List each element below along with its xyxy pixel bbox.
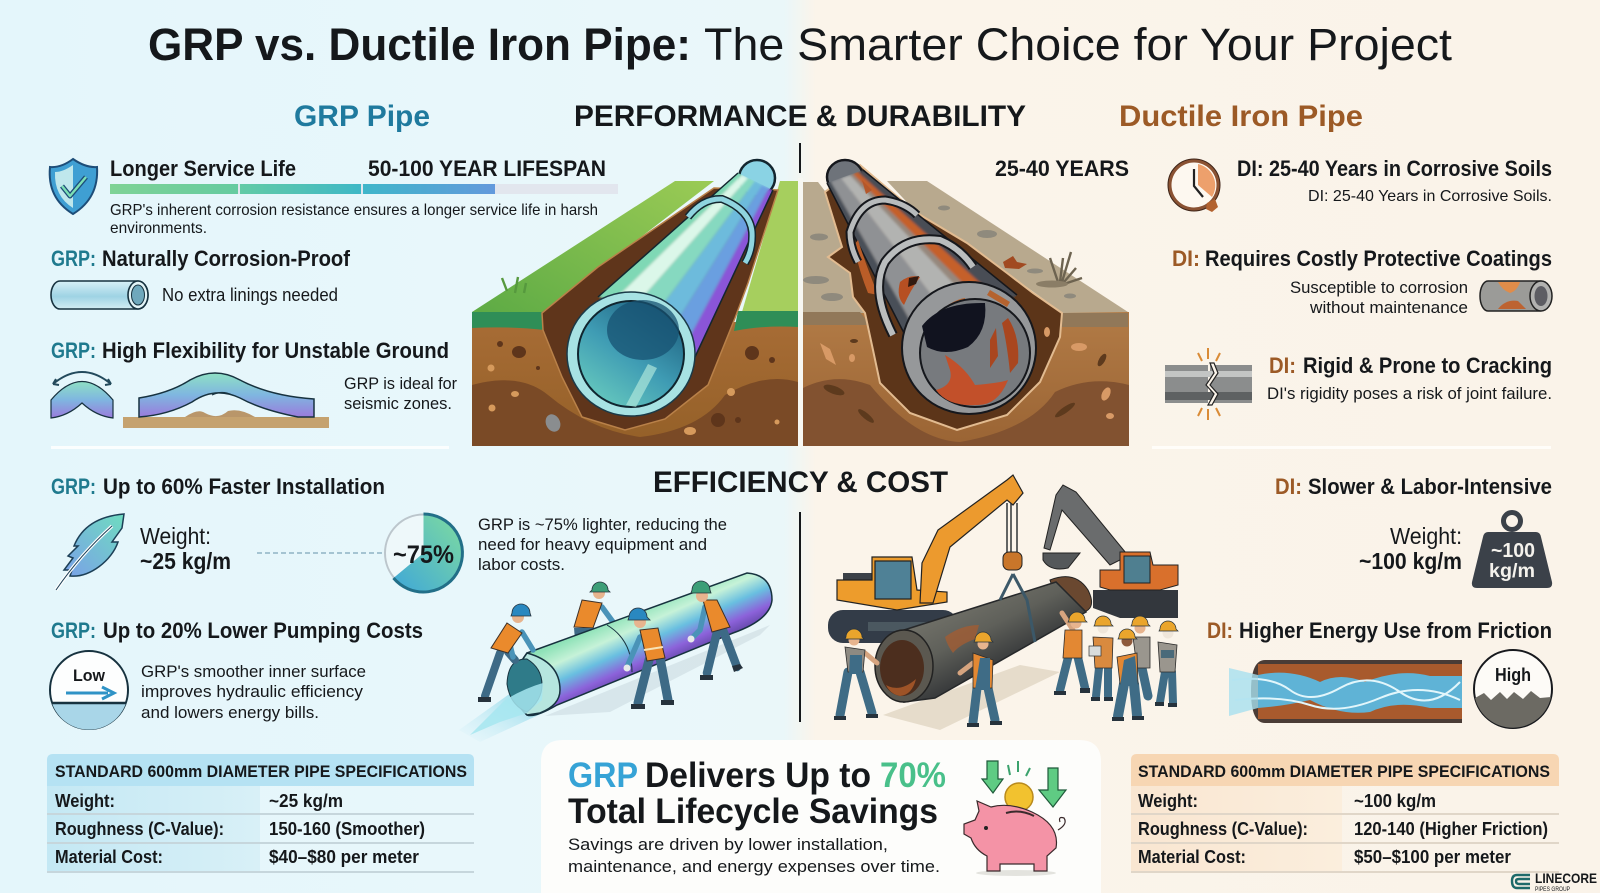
excavator: grey rear [1043, 485, 1178, 618]
icon: low friction gauge: Low [73, 666, 106, 685]
panel: DI efficiency [828, 474, 1552, 730]
text: seismic zones: GRP is ideal for [344, 374, 457, 393]
logo: Linecore [1512, 870, 1597, 893]
icon: low friction gauge [50, 651, 128, 730]
row: roughness: Roughness (C-Value): [55, 819, 224, 839]
row: weight: ~25 kg/m [269, 791, 343, 811]
heading: coatings: Requires Costly Protective Coatings [1205, 246, 1552, 271]
heading: Ductile Iron Pipe: Ductile Iron Pipe [1119, 100, 1363, 133]
title: The Smarter Choice for Your Project [704, 19, 1453, 70]
heading: corrosion proof: GRP: [51, 246, 96, 271]
heading: pumping costs: GRP: [51, 618, 96, 643]
worker front [624, 608, 674, 709]
text: service life description [110, 202, 598, 237]
heading: friction: DI: [1207, 618, 1233, 643]
heading: performance and durability: PERFORMANCE & DURABILITY [574, 100, 1026, 133]
row: material cost: Material Cost: [55, 847, 163, 867]
text: GRP weight [140, 523, 231, 574]
text: lighter description: GRP is ~75% lighter, reducing the [478, 515, 727, 534]
text: service life description: environments. [110, 220, 207, 237]
heading: faster installation: GRP: [51, 474, 96, 499]
row: weight [55, 791, 343, 811]
table rows [1131, 814, 1559, 872]
text: hydraulic efficiency: improves hydraulic efficiency [141, 682, 364, 701]
text: service life description: GRP's inherent corrosion resistance ensures a longer service life in harsh [110, 202, 598, 219]
icon: piggy bank [964, 761, 1066, 876]
icon: clock [1168, 159, 1220, 212]
panel: DI specification table [1131, 754, 1559, 872]
text: DI weight: ~100 kg/m [1359, 548, 1462, 574]
heading: rigid: Rigid & Prone to Cracking [1303, 353, 1552, 378]
center gap [798, 178, 803, 448]
worker [960, 632, 1002, 727]
heading: coatings: DI: [1172, 246, 1200, 271]
heading: corrosive soils: DI: 25-40 Years in Corrosive Soils [1237, 156, 1552, 181]
lifespan bar [110, 184, 618, 194]
text: joint failure: DI's rigidity poses a risk of joint failure. [1267, 385, 1552, 403]
icon: heavy weight [1472, 512, 1552, 588]
section dividers [51, 446, 449, 449]
worker [1131, 616, 1150, 696]
illustration: rusted ductile iron pipe in trench [803, 160, 1129, 446]
lifespan label: 25-40 YEARS [995, 156, 1129, 181]
dashed connector [257, 552, 383, 554]
icon: pipe over unstable ground [123, 373, 329, 428]
headline: GRP [568, 756, 638, 795]
table header [47, 754, 474, 786]
text: hydraulic efficiency: and lowers energy bills. [141, 703, 319, 722]
text: susceptible to corrosion: Susceptible to corrosion [1290, 278, 1468, 297]
text: susceptible to corrosion [1290, 278, 1468, 317]
text: no extra linings: No extra linings needed [162, 285, 338, 305]
title: GRP vs. Ductile Iron Pipe: [148, 19, 691, 70]
icon: heavy weight: ~100 [1491, 540, 1535, 562]
row: roughness [1138, 819, 1548, 839]
text: hydraulic efficiency: GRP's smoother inner surface [141, 662, 366, 681]
icon: cracked pipe [1165, 348, 1252, 420]
row: material cost: $50–$100 per meter [1354, 847, 1511, 867]
illustration: workers lifting GRP pipe [459, 573, 772, 742]
icon: heavy weight: kg/m [1489, 561, 1535, 582]
collar [688, 199, 752, 263]
row: roughness [55, 819, 425, 839]
row: weight: Weight: [55, 791, 115, 811]
row: roughness: 150-160 (Smoother) [269, 819, 425, 839]
worker left [478, 604, 533, 702]
heading: flexibility: High Flexibility for Unstable Ground [102, 338, 449, 363]
row: weight [1138, 791, 1436, 811]
row: roughness: 120-140 (Higher Friction) [1354, 819, 1548, 839]
text: savings description: Savings are driven by lower installation, [568, 835, 888, 854]
headline: Delivers Up to [645, 756, 871, 795]
table header [1131, 754, 1559, 786]
icon: shield [50, 159, 97, 214]
text: hydraulic efficiency [141, 662, 366, 722]
tube colour bands [598, 173, 772, 354]
panel: DI performance [995, 156, 1552, 420]
text: lighter description: labor costs. [478, 555, 565, 574]
icon: rough pipe with turbulent flow [1229, 660, 1462, 723]
card [541, 740, 1101, 893]
left column shading [47, 786, 260, 872]
illustration: excavators lifting iron pipe [828, 475, 1178, 730]
tube colour bands [828, 170, 1017, 330]
icon: high friction gauge [1474, 650, 1552, 728]
heading: GRP Pipe: GRP Pipe [294, 100, 430, 133]
worker [1155, 621, 1178, 707]
rings [850, 200, 917, 262]
text: corrosive soils: DI: 25-40 Years in Corrosive Soils. [1308, 188, 1552, 205]
heading: efficiency and cost: EFFICIENCY & COST [653, 466, 948, 499]
illustration: GRP pipe in trench [472, 160, 798, 446]
text: savings description [568, 835, 940, 876]
excavator: orange front [828, 475, 1023, 643]
icon: feather [56, 514, 124, 590]
worker behind pipe [574, 582, 613, 640]
icon: rusted pipe [1480, 281, 1552, 311]
table title: STANDARD 600mm DIAMETER PIPE SPECIFICATIONS [55, 762, 467, 781]
left column shading [1131, 786, 1342, 872]
heading: rigid: DI: [1269, 353, 1296, 378]
collar and opening [514, 653, 560, 715]
headline: Total Lifecycle Savings [568, 792, 938, 831]
text: lighter description: need for heavy equipment and [478, 535, 707, 554]
text: GRP weight: ~25 kg/m [140, 548, 231, 574]
worker [1089, 616, 1113, 701]
icon: bending pipe [51, 372, 113, 418]
panel: GRP specification table [47, 754, 474, 872]
heading: faster installation: Up to 60% Faster Installation [103, 474, 385, 499]
logo: Linecore: PIPES GROUP [1535, 887, 1570, 893]
center divider top [799, 143, 801, 173]
title [148, 19, 1453, 70]
panel: GRP performance [50, 156, 618, 428]
heading: longer service life: Longer Service Life [110, 156, 296, 181]
chart: 75 percent lighter [385, 514, 462, 592]
heading: slower: DI: [1275, 474, 1302, 499]
text: DI weight [1359, 523, 1462, 574]
row: weight: ~100 kg/m [1354, 791, 1436, 811]
pipe body [514, 573, 772, 716]
row: material cost: $40–$80 per meter [269, 847, 419, 867]
text: lighter description [478, 515, 727, 574]
large iron pipe [875, 574, 1092, 702]
worker [834, 629, 878, 720]
worker [1054, 612, 1090, 695]
row: roughness: Roughness (C-Value): [1138, 819, 1308, 839]
heading: slower: Slower & Labor-Intensive [1308, 474, 1552, 499]
table rows [47, 814, 474, 872]
lifespan label: 50-100 YEAR LIFESPAN [368, 156, 606, 181]
text: savings description: maintenance, and energy expenses over time. [568, 857, 940, 876]
row: weight: Weight: [1138, 791, 1198, 811]
row: material cost: Material Cost: [1138, 847, 1246, 867]
worker right [688, 581, 743, 680]
panel: lifecycle savings [541, 740, 1101, 893]
text: GRP weight: Weight: [140, 523, 211, 549]
heading: pumping costs: Up to 20% Lower Pumping Costs [103, 618, 423, 643]
heading: friction: Higher Energy Use from Friction [1239, 618, 1552, 643]
panel: GRP efficiency [50, 474, 772, 742]
table title: STANDARD 600mm DIAMETER PIPE SPECIFICATIONS [1138, 762, 1550, 781]
text: seismic zones [344, 374, 457, 413]
headline [568, 756, 946, 831]
text: susceptible to corrosion: without maintenance [1309, 298, 1468, 317]
row: material cost [1138, 847, 1511, 867]
center divider bottom [799, 512, 801, 722]
chart: 75 percent lighter: ~75% [393, 541, 454, 569]
heading: flexibility: GRP: [51, 338, 96, 363]
headline: 70% [880, 756, 946, 795]
icon: high friction gauge: High [1495, 665, 1531, 685]
row: material cost [55, 847, 419, 867]
text: DI weight: Weight: [1390, 523, 1462, 549]
heading: corrosion proof: Naturally Corrosion-Proof [102, 246, 351, 271]
worker [1112, 629, 1144, 721]
icon: smooth pipe [51, 281, 148, 309]
text: seismic zones: seismic zones. [344, 394, 452, 413]
